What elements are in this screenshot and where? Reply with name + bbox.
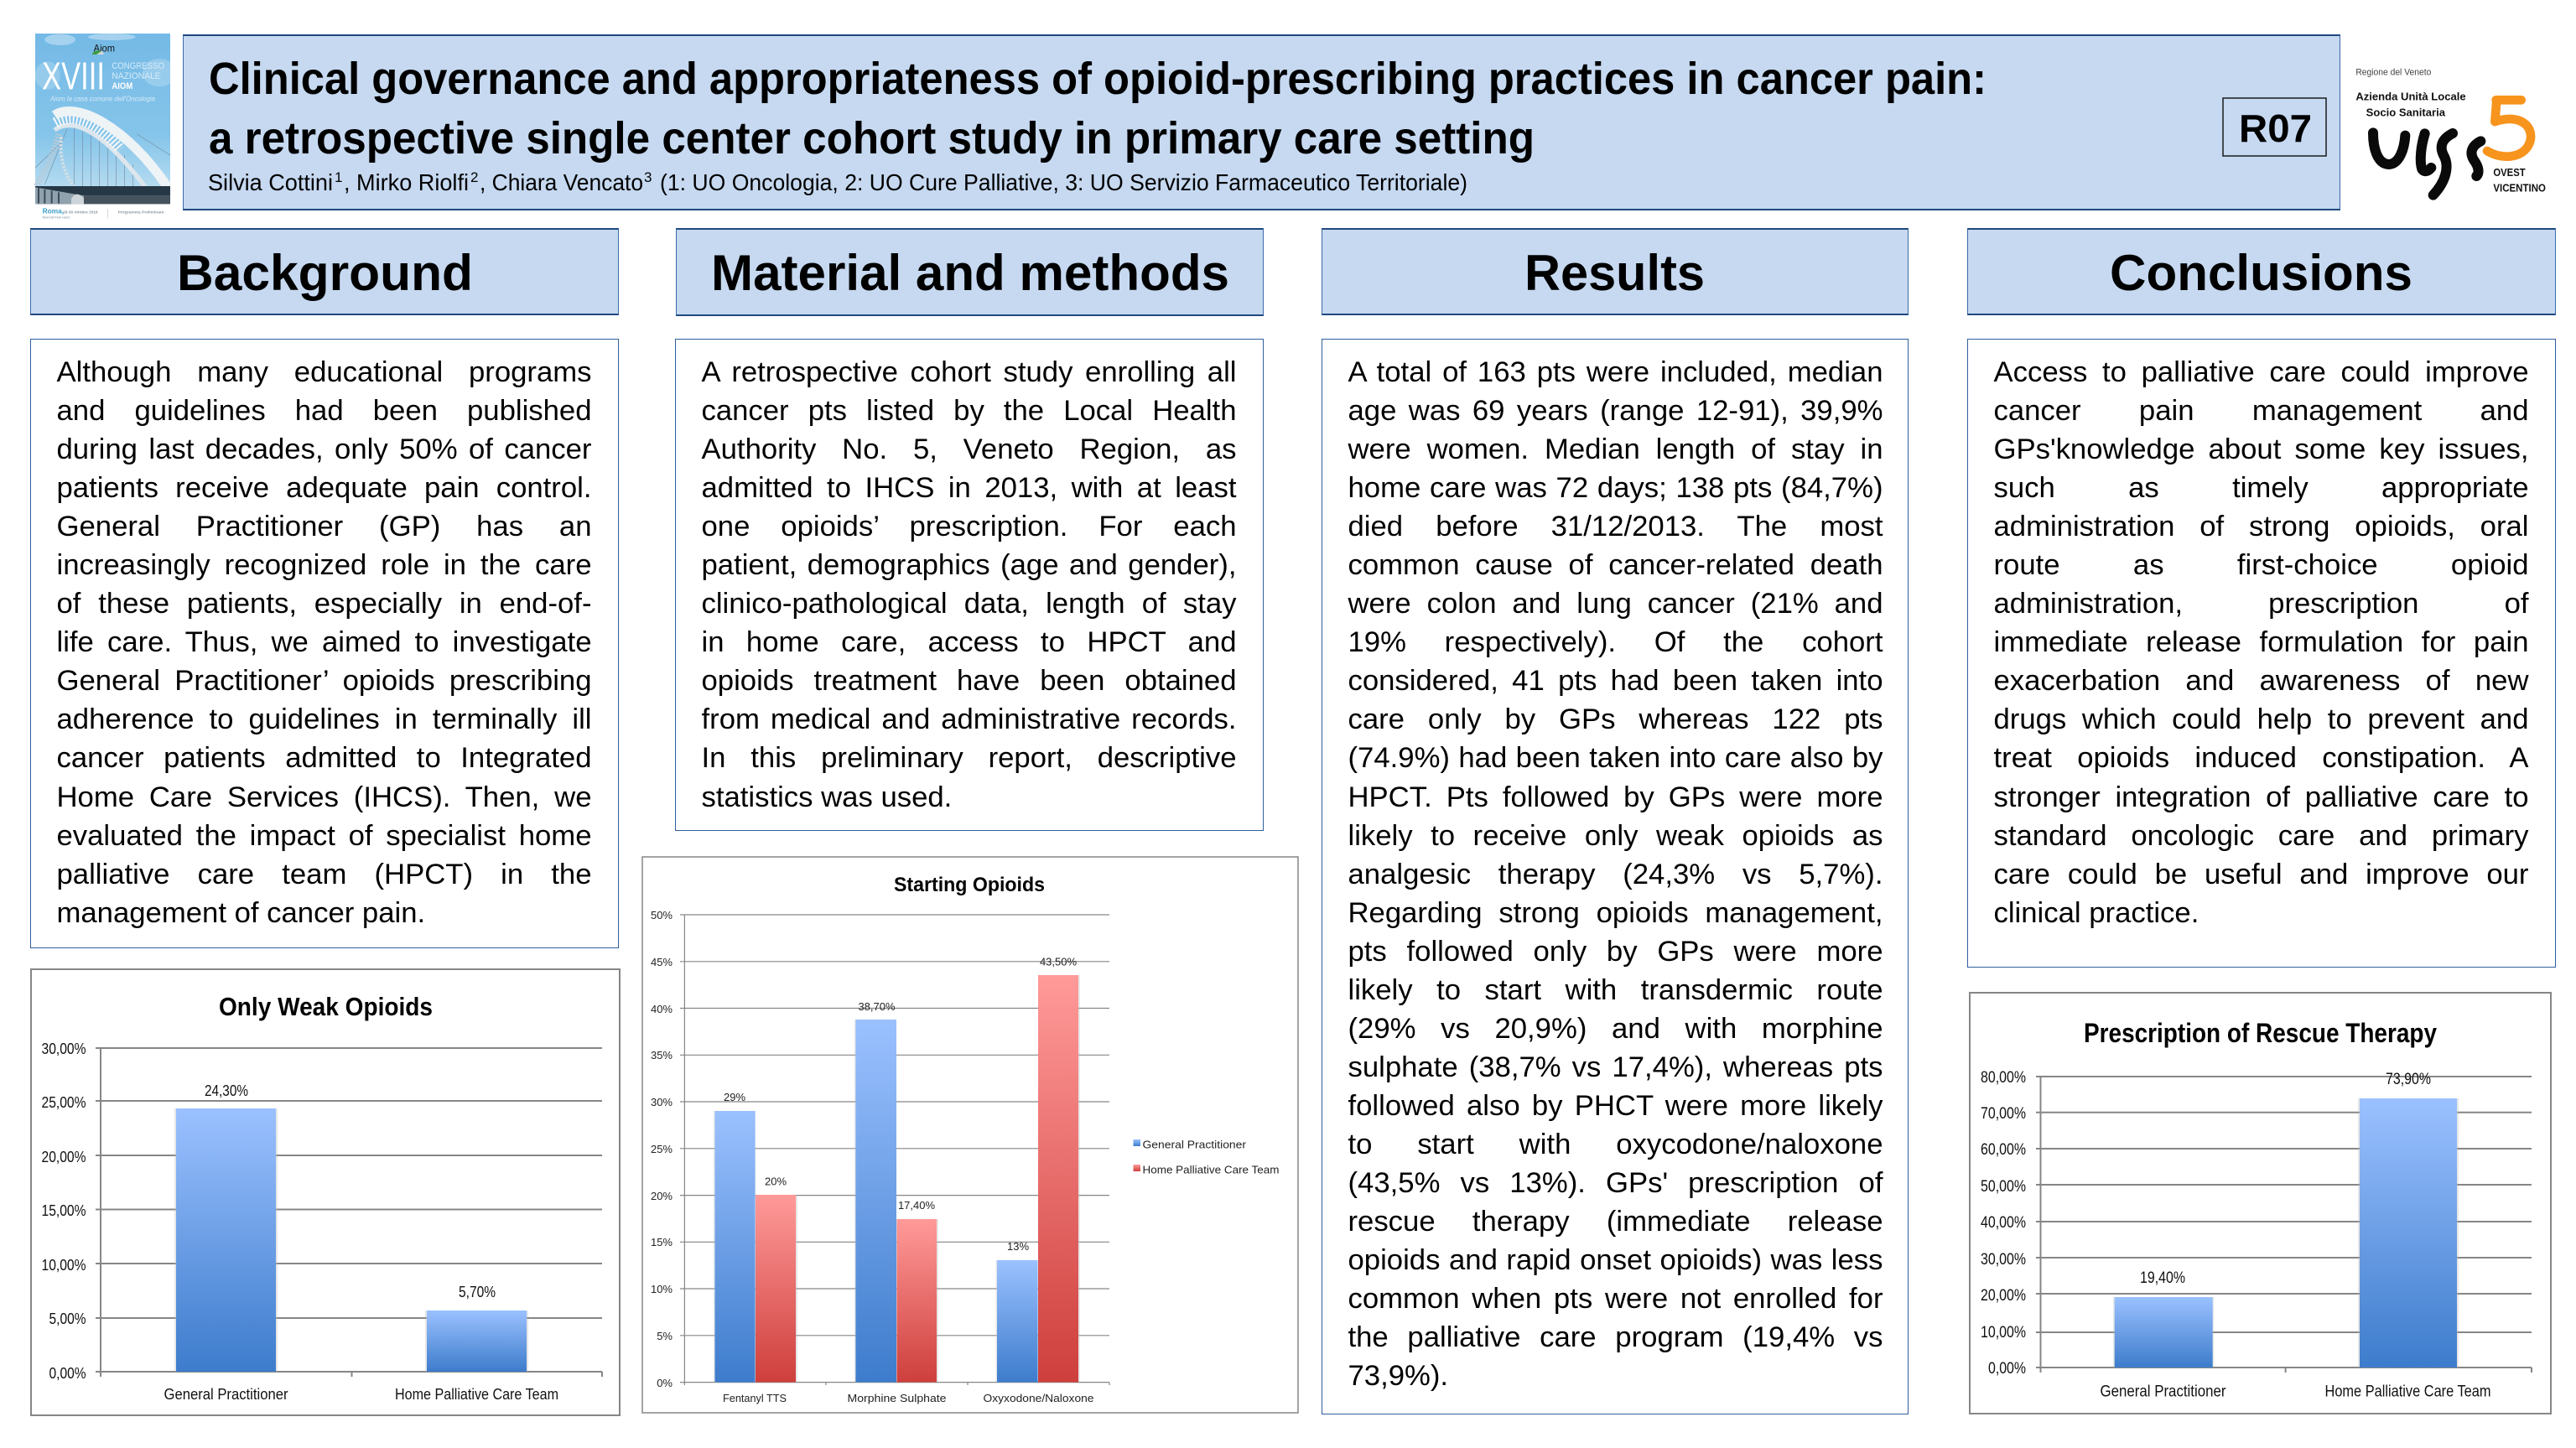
panel: results text: 73,9%).: [1348, 1360, 1448, 1392]
panel: background text: patients receive adequate pain control.: [57, 472, 592, 504]
panel: material and methods text: in home care, access to HPCT and: [701, 626, 1236, 658]
panel: results text: [1322, 339, 1909, 1414]
y axis labels: 10,00%: [42, 1257, 86, 1274]
bar chart: only weak opioids: [30, 968, 621, 1416]
panel: background text: life care. Thus, we aimed to investigate: [57, 626, 592, 658]
panel: conclusions text: clinical practice.: [1994, 897, 2199, 929]
panel: results text: rescue therapy (immediate release: [1348, 1206, 1883, 1238]
logo: ULSS 5 Ovest Vicentino: Regione del Veneto: [2355, 67, 2431, 77]
panel: background text: General Practitioner’ opioids prescribing: [57, 665, 592, 697]
y axis labels: 70,00%: [1981, 1105, 2026, 1123]
bar: general practitioner 24,30%: 24,30%: [205, 1082, 248, 1099]
panel: results text: (43,5% vs 13%). GPs' prescription of: [1348, 1167, 1883, 1199]
panel: material and methods text: cancer pts listed by the Local Health: [701, 395, 1236, 427]
chart title: Only Weak Opioids: [219, 992, 433, 1021]
heading: Material and methods: [676, 228, 1264, 316]
chart title: Starting Opioids: [894, 874, 1045, 896]
y axis labels: 20,00%: [42, 1149, 86, 1165]
panel: background text: management of cancer pain.: [57, 897, 425, 929]
y axis labels: [651, 909, 673, 1389]
y axis labels: 10%: [651, 1283, 673, 1295]
panel: background text: palliative care team (HPCT) in the: [57, 859, 592, 890]
panel: material and methods text: admitted to IHCS in 2013, with at least: [701, 472, 1236, 504]
y axis labels: 30,00%: [1981, 1251, 2026, 1269]
authors and affiliations: 3: [644, 169, 652, 185]
image: congress programme cover: Programma Preliminare: [118, 210, 164, 215]
bars: oxycodone naloxone: [996, 956, 1080, 1383]
panel: material and methods text: clinico-pathological data, length of stay: [701, 588, 1236, 620]
panel: results text: opioids and rapid onset opioids) was less: [1348, 1244, 1883, 1276]
image: congress programme cover: NAZIONALE: [112, 71, 161, 81]
category labels: Morphine Sulphate: [847, 1392, 946, 1404]
image: congress programme cover: CONGRESSO: [112, 61, 164, 71]
panel: results text: were women. Median length of stay in: [1348, 433, 1883, 465]
category labels: Oxyxodone/Naloxone: [983, 1392, 1093, 1404]
y axis labels: 15,00%: [42, 1202, 86, 1219]
category labels: General Practitioner: [2100, 1383, 2226, 1401]
poster code R07: R07: [2239, 106, 2312, 150]
panel: background text: Home Care Services (IHCS). Then, we: [57, 781, 592, 813]
panel: conclusions text: treat opioids induced constipation. A: [1994, 742, 2529, 774]
y axis labels: 25,00%: [42, 1094, 86, 1111]
y axis labels: 0,00%: [49, 1365, 86, 1382]
panel: results text: considered, 41 pts had been taken into: [1348, 665, 1883, 697]
heading: Results: [1322, 228, 1909, 315]
legend: Home Palliative Care Team: [1142, 1164, 1280, 1176]
bar chart: starting opioids: [641, 856, 1299, 1414]
panel: results text: to start with oxycodone/naloxone: [1348, 1129, 1883, 1160]
y axis labels: 5,00%: [49, 1310, 86, 1327]
panel: results text: sulphate (38,7% vs 17,4%), whereas pts: [1348, 1051, 1883, 1083]
chart title: Prescription of Rescue Therapy: [2084, 1018, 2437, 1048]
panel: material and methods text: one opioids’ prescription. For each: [701, 511, 1236, 542]
panel: material and methods text: In this preliminary report, descriptive: [701, 742, 1236, 774]
heading: Results: Results: [1524, 245, 1705, 301]
panel: results text: analgesic therapy (24,3% vs 5,7%).: [1348, 859, 1883, 890]
panel: results text: 19% respectively). Of the cohort: [1348, 626, 1883, 658]
category labels: [723, 1392, 1093, 1404]
panel: background text: and guidelines had been published: [57, 395, 592, 427]
panel: conclusions text: [1967, 339, 2556, 968]
y axis labels: [1981, 1069, 2026, 1378]
panel: results text: were colon and lung cancer (21% and: [1348, 588, 1883, 620]
bar: home palliative care team 73,90%: 73,90%: [2386, 1071, 2431, 1088]
panel: results text: care only by GPs whereas 122 pts: [1348, 703, 1883, 735]
authors and affiliations: , Chiara Vencato: [480, 169, 643, 195]
panel: results text: likely to start with transdermic route: [1348, 974, 1883, 1006]
panel: background text: [30, 339, 619, 948]
panel: conclusions text: care could be useful and improve our: [1994, 859, 2529, 890]
panel: results text: (74.9%) had been taken into care also by: [1348, 742, 1883, 774]
category labels: Home Palliative Care Team: [2324, 1383, 2490, 1401]
bars: fentanyl TTS: 29%: [724, 1091, 745, 1103]
y axis labels: 0%: [657, 1377, 673, 1389]
bars: morphine sulphate: [854, 1000, 938, 1383]
panel: conclusions text: route as first-choice opioid: [1994, 549, 2529, 581]
bar: home palliative care team 73,90%: [2358, 1071, 2459, 1368]
y axis labels: 35%: [651, 1049, 673, 1061]
panel: conclusions text: exacerbation and awareness of new: [1994, 665, 2529, 697]
category labels: [164, 1386, 558, 1403]
y axis labels: 50,00%: [1981, 1178, 2026, 1196]
panel: conclusions text: Access to palliative care could improve: [1994, 356, 2529, 388]
panel: results text: followed also by PHCT were more likely: [1348, 1090, 1883, 1122]
panel: results text: common cause of cancer-related death: [1348, 549, 1883, 581]
y axis labels: 40%: [651, 1003, 673, 1015]
authors and affiliations: 1: [335, 169, 342, 185]
panel: background text: General Practitioner (GP) has an: [57, 511, 592, 542]
image: congress programme cover: Aiom la casa comune dell'Oncologia: [49, 95, 155, 103]
panel: material and methods text: from medical and administrative records.: [701, 703, 1236, 735]
panel: results text: HPCT. Pts followed by GPs were more: [1348, 781, 1883, 813]
panel: results text: common when pts were not enrolled for: [1348, 1283, 1883, 1315]
y axis labels: 40,00%: [1981, 1214, 2026, 1232]
authors and affiliations: (1: UO Oncologia, 2: UO Cure Palliative, 3: UO Servizio Farmaceutico Territoriale): [660, 169, 1467, 195]
panel: background text: adherence to guidelines in terminally ill: [57, 703, 592, 735]
bars: fentanyl TTS: 20%: [765, 1176, 787, 1187]
panel: material and methods text: statistics was used.: [701, 781, 952, 813]
y axis labels: 20,00%: [1981, 1287, 2026, 1305]
y axis labels: 60,00%: [1981, 1141, 2026, 1159]
image: congress programme cover: Marriott Park Hotel: [43, 216, 70, 220]
bar chart: prescription of rescue therapy: [1969, 992, 2552, 1414]
bars: fentanyl TTS: [714, 1091, 797, 1383]
logo: ULSS 5 Ovest Vicentino: OVEST: [2493, 167, 2526, 179]
y axis labels: 80,00%: [1981, 1069, 2026, 1087]
bars: oxycodone naloxone: 13%: [1007, 1240, 1029, 1253]
panel: material and methods text: A retrospective cohort study enrolling all: [701, 356, 1236, 388]
category labels: [2100, 1383, 2490, 1401]
image: congress programme cover: Aiom: [94, 43, 115, 54]
y axis labels: 45%: [651, 956, 673, 968]
panel: material and methods text: patient, demographics (age and gender),: [701, 549, 1236, 581]
panel: background text: increasingly recognized role in the care: [57, 549, 592, 581]
panel: results text: A total of 163 pts were included, median: [1348, 356, 1883, 388]
panel: results text: home care was 72 days; 138 pts (84,7%): [1348, 472, 1883, 504]
category labels: Home Palliative Care Team: [395, 1386, 558, 1403]
heading: Conclusions: Conclusions: [2110, 245, 2412, 301]
heading: Conclusions: [1967, 228, 2556, 315]
bar: home palliative care team 5,70%: 5,70%: [459, 1284, 496, 1300]
title line 1: Clinical governance and appropriateness of opioid-prescribing practices in cancer pain:: [209, 54, 1987, 104]
panel: conclusions text: standard oncologic care and primary: [1994, 820, 2529, 852]
panel: conclusions text: such as timely appropriate: [1994, 472, 2529, 504]
y axis labels: 20%: [651, 1190, 673, 1202]
logo: ULSS 5 Ovest Vicentino: Azienda Unità Locale: [2355, 90, 2466, 102]
y axis labels: [42, 1041, 86, 1382]
panel: title banner: [183, 34, 2340, 210]
authors and affiliations: , Mirko Riolfi: [344, 169, 469, 195]
panel: background text: during last decades, only 50% of cancer: [57, 433, 592, 465]
image: congress programme cover: 28-30 ottobre 2016: [63, 210, 98, 215]
heading: Material and methods: Material and methods: [711, 245, 1229, 301]
legend: General Practitioner: [1142, 1139, 1247, 1150]
y axis labels: 30%: [651, 1096, 673, 1108]
panel: background text: Although many educational programs: [57, 356, 592, 388]
heading: Background: Background: [177, 245, 473, 301]
panel: conclusions text: administration, prescription of: [1994, 588, 2529, 620]
category labels: Fentanyl TTS: [723, 1392, 787, 1404]
authors and affiliations: [208, 169, 1467, 195]
panel: results text: pts followed only by GPs were more: [1348, 936, 1883, 968]
y axis labels: 0,00%: [1988, 1360, 2026, 1378]
y axis labels: 5%: [657, 1330, 673, 1342]
panel: conclusions text: administration of strong opioids, oral: [1994, 511, 2529, 542]
panel: conclusions text: GPs'knowledge about some key issues,: [1994, 433, 2529, 465]
panel: conclusions text: drugs which could help to prevent and: [1994, 703, 2529, 735]
logo: ULSS 5 Ovest Vicentino: Socio Sanitaria: [2366, 106, 2446, 118]
panel: material and methods text: [675, 339, 1264, 831]
authors and affiliations: 2: [470, 169, 478, 185]
bar: general practitioner 19,40%: 19,40%: [2140, 1269, 2185, 1287]
logo: ULSS 5 Ovest Vicentino: [2355, 67, 2546, 200]
bars: oxycodone naloxone: 43,50%: [1040, 956, 1077, 968]
panel: conclusions text: immediate release formulation for pain: [1994, 626, 2529, 658]
panel: results text: Regarding strong opioids management,: [1348, 897, 1883, 929]
panel: results text: (29% vs 20,9%) and with morphine: [1348, 1013, 1883, 1045]
poster code R07: [2223, 98, 2326, 156]
image: congress programme cover: Roma,: [43, 207, 64, 215]
panel: background text: of these patients, especially in end-of-: [57, 588, 592, 620]
panel: conclusions text: stronger integration of palliative care to: [1994, 781, 2529, 813]
y axis labels: 15%: [651, 1236, 673, 1248]
bars: morphine sulphate: 17,40%: [898, 1199, 935, 1212]
panel: material and methods text: Authority No. 5, Veneto Region, as: [701, 433, 1236, 465]
y axis labels: 50%: [651, 909, 673, 921]
bar: home palliative care team 5,70%: [425, 1284, 528, 1372]
category labels: General Practitioner: [164, 1386, 288, 1403]
authors and affiliations: Silvia Cottini: [208, 169, 333, 195]
legend: [1134, 1139, 1280, 1176]
panel: results text: the palliative care program (19,4% vs: [1348, 1321, 1883, 1353]
panel: conclusions text: cancer pain management and: [1994, 395, 2529, 427]
panel: results text: likely to receive only weak opioids as: [1348, 820, 1883, 852]
bar: general practitioner 24,30%: [174, 1082, 278, 1372]
panel: results text: age was 69 years (range 12-91), 39,9%: [1348, 395, 1883, 427]
y axis labels: 25%: [651, 1143, 673, 1155]
y axis labels: 10,00%: [1981, 1324, 2026, 1342]
panel: background text: cancer patients admitted to Integrated: [57, 742, 592, 774]
bars: morphine sulphate: 38,70%: [858, 1000, 896, 1013]
title line 2: a retrospective single center cohort study in primary care setting: [209, 113, 1535, 163]
panel: results text: died before 31/12/2013. The most: [1348, 511, 1883, 542]
image: congress programme cover: [34, 34, 171, 220]
panel: material and methods text: opioids treatment have been obtained: [701, 665, 1236, 697]
image: congress programme cover: AIOM: [112, 81, 132, 91]
image: congress programme cover: XVIII: [42, 54, 105, 98]
bar: general practitioner 19,40%: [2113, 1269, 2214, 1368]
y axis labels: 30,00%: [42, 1041, 86, 1057]
panel: background text: evaluated the impact of specialist home: [57, 820, 592, 852]
heading: Background: [30, 228, 619, 315]
logo: ULSS 5 Ovest Vicentino: VICENTINO: [2493, 182, 2546, 194]
